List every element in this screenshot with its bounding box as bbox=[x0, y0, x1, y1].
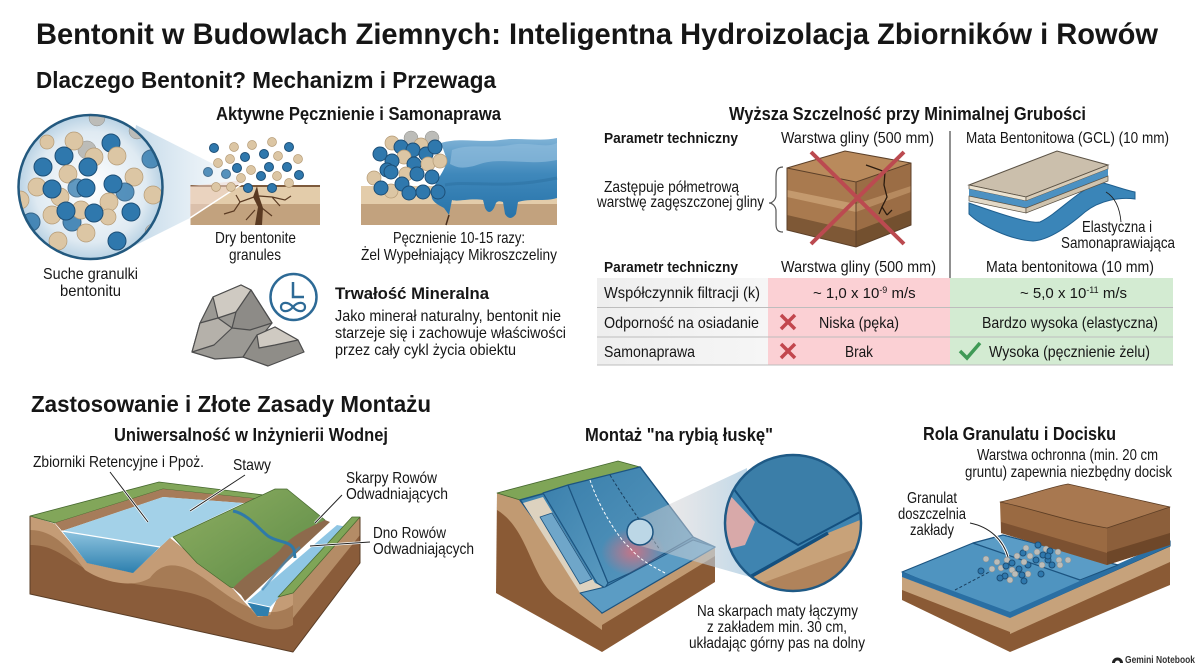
illustration: ground block with liner and granulate bbox=[902, 484, 1170, 652]
brace bbox=[769, 167, 783, 232]
comparison table bbox=[597, 259, 1173, 365]
heading: higher tightness: Wyższa Szczelność przy Minimalnej Grubości bbox=[729, 104, 1086, 124]
text: overlap instructions bbox=[689, 603, 865, 652]
magnifier cone: overlap bbox=[637, 468, 750, 577]
row: filtration coefficient: Współczynnik filtracji (k) bbox=[604, 285, 760, 302]
text: mineral durability body: Jako minerał naturalny, bentonit nie bbox=[335, 308, 561, 325]
comparison header row: Warstwa gliny (500 mm) bbox=[781, 130, 934, 147]
row: settlement resistance: Niska (pęka) bbox=[819, 315, 899, 332]
row: filtration coefficient: ~ 1,0 x 10 bbox=[813, 285, 879, 302]
row: filtration coefficient bbox=[604, 285, 1127, 302]
label: ditch slopes bbox=[346, 470, 448, 503]
heading: why bentonite: Dlaczego Bentonit? Mechanizm i Przewaga bbox=[36, 67, 496, 93]
text: overlap instructions: układając górny pas na dolny bbox=[689, 635, 865, 652]
row: filtration coefficient: -9 bbox=[879, 285, 887, 295]
row: self-repair: Brak bbox=[845, 344, 874, 361]
label: granulate seals overlaps: doszczelnia bbox=[898, 506, 966, 523]
heading: application and golden rules: Zastosowanie i Złote Zasady Montażu bbox=[31, 391, 431, 417]
icon: rocks bbox=[192, 285, 304, 366]
label: dry bentonite granules: granules bbox=[229, 247, 281, 264]
label: swelling: Żel Wypełniający Mikroszczeliny bbox=[361, 245, 557, 264]
label: swelling: Pęcznienie 10-15 razy: bbox=[393, 230, 525, 247]
heading: fish-scale installation: Montaż "na rybią łuskę" bbox=[585, 425, 773, 445]
illustration: slope with overlapping mats bbox=[496, 461, 715, 652]
detail: magnified overlap joint bbox=[724, 454, 862, 592]
label: dry granules: bentonitu bbox=[60, 283, 121, 300]
small detail circle bbox=[627, 519, 653, 545]
label: ditch bottom: Dno Rowów bbox=[373, 525, 446, 542]
label: dry bentonite granules: Dry bentonite bbox=[215, 230, 296, 247]
label: swelling bbox=[361, 230, 557, 264]
row: filtration coefficient: ~ 5,0 x 10 bbox=[1020, 285, 1086, 302]
row: settlement resistance: Bardzo wysoka (elastyczna) bbox=[982, 315, 1158, 332]
row: self-repair: Wysoka (pęcznienie żelu) bbox=[989, 344, 1150, 361]
row: self-repair bbox=[604, 343, 1150, 361]
row: filtration coefficient: m/s bbox=[887, 285, 916, 302]
heading: universality: Uniwersalność w Inżynierii Wodnej bbox=[114, 425, 388, 445]
label: ditch bottom: Odwadniających bbox=[373, 541, 474, 558]
label: dry granules: Suche granulki bbox=[43, 266, 138, 283]
illustration: clay block crossed out bbox=[787, 151, 911, 247]
label: retention reservoirs: Zbiorniki Retencyjne i Ppoż. bbox=[33, 454, 204, 471]
table header: Warstwa gliny (500 mm) bbox=[781, 259, 936, 276]
label: elastic and self-healing bbox=[1061, 219, 1175, 252]
row: settlement resistance bbox=[604, 315, 1158, 332]
illustration: geosynthetic clay liner mat bbox=[969, 151, 1135, 241]
label: granulate seals overlaps: Granulat bbox=[907, 490, 957, 507]
row: filtration coefficient: m/s bbox=[1099, 285, 1127, 302]
table header: Parametr techniczny bbox=[604, 259, 739, 276]
comparison header row bbox=[604, 130, 1169, 147]
text: overlap instructions: Na skarpach maty łączymy bbox=[697, 603, 858, 620]
label: granulate seals overlaps: zakłady bbox=[910, 522, 954, 539]
title: Bentonit w Budowlach Ziemnych: Inteligentna Hydroizolacja Zbiorników i Rowów bbox=[36, 18, 1159, 51]
label: ditch slopes: Odwadniających bbox=[346, 486, 448, 503]
icon: magnified dry granules bbox=[11, 110, 162, 259]
label: granulate seals overlaps bbox=[898, 490, 966, 539]
comparison header row: Parametr techniczny bbox=[604, 130, 739, 147]
magnifier cone bbox=[116, 125, 245, 255]
label: dry bentonite granules bbox=[215, 230, 296, 264]
heading: role of granulate: Rola Granulatu i Docisku bbox=[923, 424, 1116, 444]
illustration: terrain cross-section bbox=[30, 472, 370, 652]
label: ponds: Stawy bbox=[233, 457, 271, 474]
icon: clock with infinity bbox=[270, 274, 316, 320]
label: replaces half-metre clay bbox=[596, 179, 764, 211]
text: overlap instructions: z zakładem min. 30 cm, bbox=[707, 619, 847, 636]
heading: active swelling: Aktywne Pęcznienie i Samonaprawa bbox=[216, 104, 502, 124]
text: mineral durability body bbox=[335, 308, 566, 359]
label: elastic and self-healing: Samonaprawiająca bbox=[1061, 235, 1175, 252]
label: ditch bottom bbox=[373, 525, 474, 558]
text: mineral durability body: starzeje się i zachowuje właściwości bbox=[335, 325, 566, 342]
row: filtration coefficient: -11 bbox=[1086, 285, 1099, 295]
row: self-repair: Samonaprawa bbox=[604, 344, 695, 361]
text: mineral durability body: przez cały cykl życia obiektu bbox=[335, 342, 516, 359]
table backgrounds bbox=[597, 278, 1173, 365]
label: ditch slopes: Skarpy Rowów bbox=[346, 470, 437, 487]
heading: mineral durability: Trwałość Mineralna bbox=[335, 284, 490, 303]
illustration: dry granules on cracked soil bbox=[190, 138, 320, 225]
label: replaces half-metre clay: Zastępuje półmetrową bbox=[604, 179, 739, 196]
label: dry granules bbox=[43, 266, 138, 300]
table header: Mata bentonitowa (10 mm) bbox=[986, 259, 1154, 276]
comparison header row: Mata Bentonitowa (GCL) (10 mm) bbox=[966, 130, 1169, 147]
text: protective layer bbox=[965, 447, 1173, 481]
label: replaces half-metre clay: warstwę zagęszczonej gliny bbox=[596, 194, 764, 211]
row: settlement resistance: Odporność na osiadanie bbox=[604, 315, 759, 332]
table header bbox=[604, 259, 1154, 276]
divider: comparison bbox=[949, 131, 951, 365]
text: protective layer: Warstwa ochronna (min. 20 cm bbox=[977, 447, 1158, 464]
label: elastic and self-healing: Elastyczna i bbox=[1082, 219, 1152, 236]
illustration: swelling gel bbox=[361, 131, 557, 225]
